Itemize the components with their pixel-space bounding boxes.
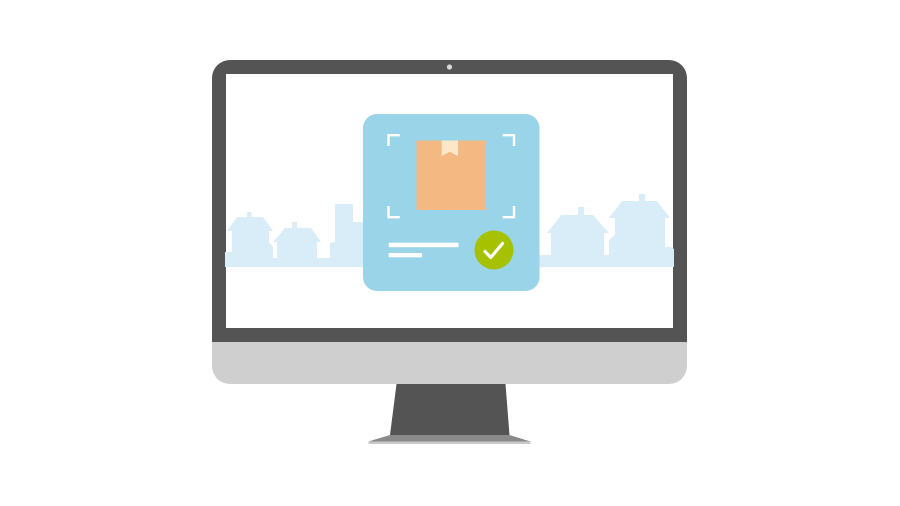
text lines [389,243,458,257]
monitor stand [368,384,530,444]
right houses [539,194,674,267]
scan card [363,114,540,291]
parcel box [416,140,486,210]
monitor body [212,60,687,384]
left houses [225,204,364,267]
scan brackets [388,135,514,217]
icon: green check badge [474,230,514,270]
town skyline [225,194,674,267]
